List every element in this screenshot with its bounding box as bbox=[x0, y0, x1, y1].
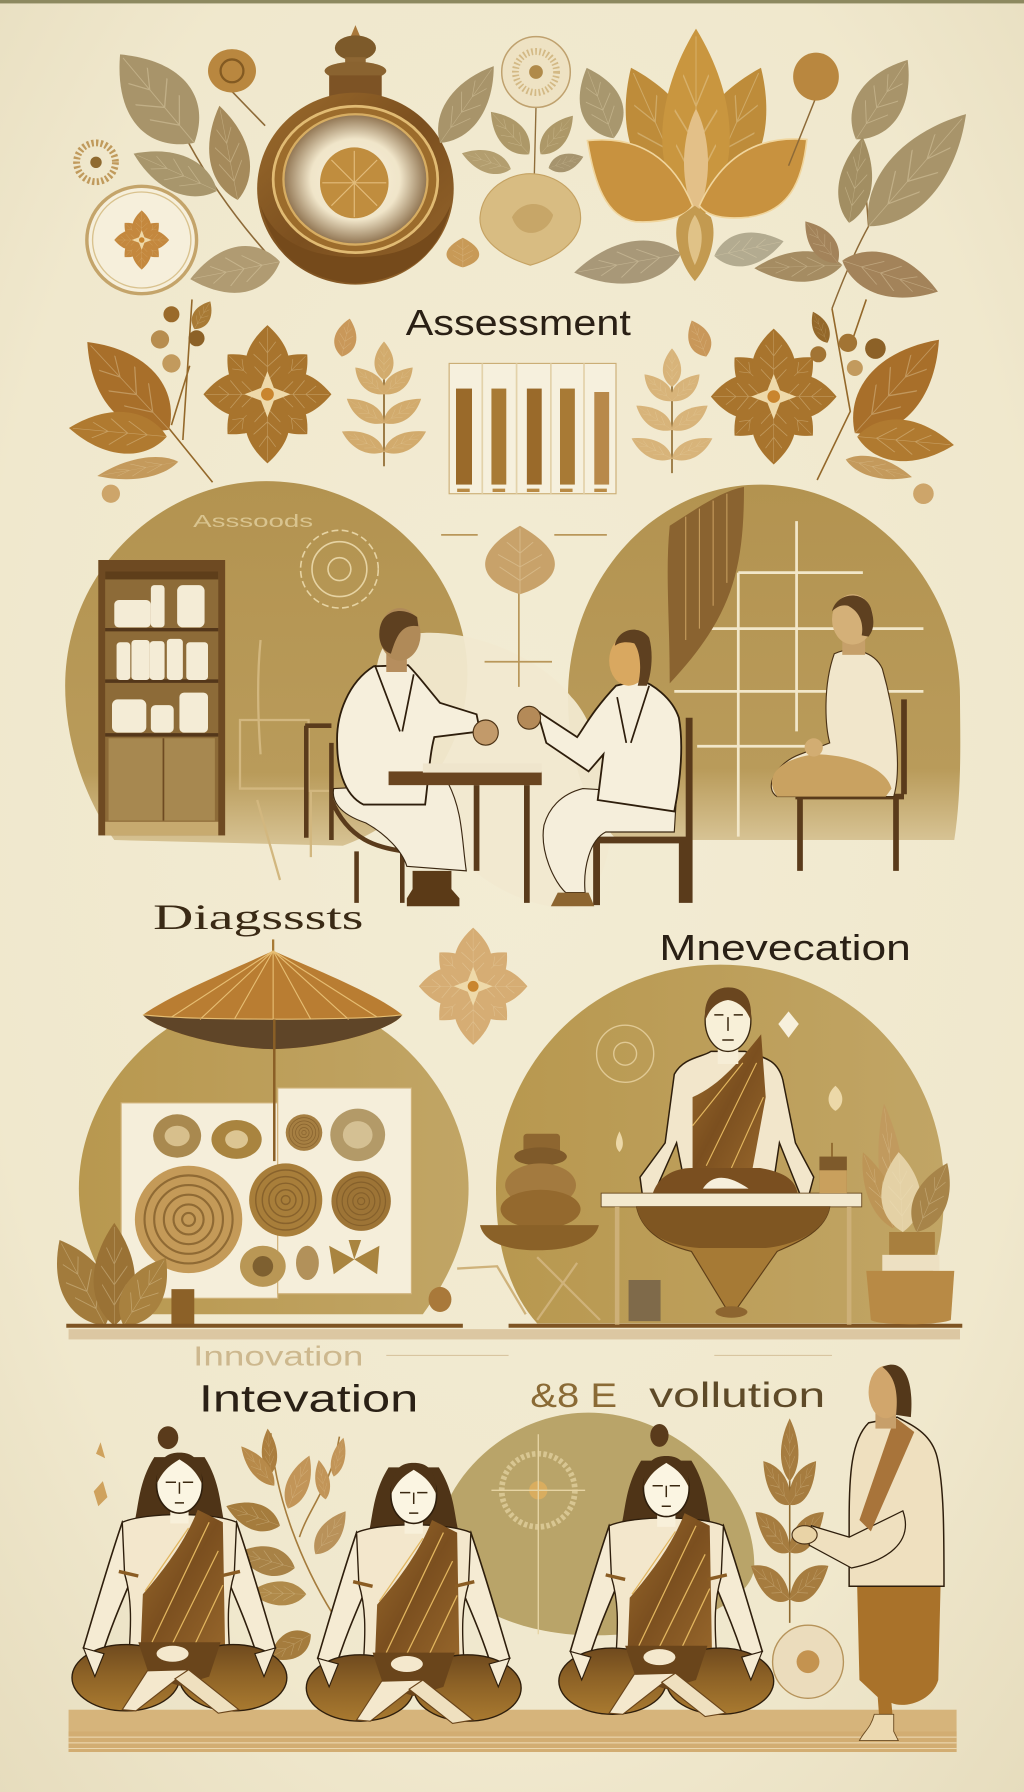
central seed medallions and leaves bbox=[425, 37, 633, 267]
central leaf bbox=[441, 526, 607, 687]
figure 1 bbox=[72, 1426, 287, 1713]
vase bbox=[819, 1143, 847, 1193]
panel: meditation bbox=[429, 965, 962, 1325]
figure: practitioner right bbox=[518, 630, 681, 906]
panel: consultation room bbox=[65, 481, 960, 909]
pendant vessel bbox=[257, 25, 454, 285]
heading: Diagnosis: Diagsssts bbox=[153, 897, 363, 937]
heading: Assessment: Assessment bbox=[406, 302, 631, 343]
left botanical group bbox=[67, 297, 431, 503]
right leaf cluster bbox=[754, 47, 987, 311]
right chair bbox=[594, 718, 689, 905]
figure: meditating practitioner bbox=[640, 987, 814, 1194]
pole bbox=[273, 1019, 275, 1161]
floating flower bbox=[419, 928, 527, 1045]
books bbox=[629, 1280, 661, 1321]
heading: and Evolution bbox=[530, 1375, 825, 1415]
cream floor glow bbox=[376, 633, 611, 909]
bookshelf bbox=[98, 560, 225, 835]
jars bbox=[480, 1134, 599, 1250]
poster bbox=[121, 1019, 411, 1298]
faded label: Innovation: Innovation bbox=[193, 1341, 363, 1372]
faded desk sketch bbox=[240, 640, 331, 880]
plant bbox=[39, 1223, 194, 1336]
right botanical group bbox=[627, 299, 960, 504]
assessment botanical row and chart bbox=[67, 297, 960, 504]
left arch bbox=[79, 994, 469, 1314]
faded sketch bbox=[457, 1257, 600, 1320]
standing practitioner bbox=[792, 1365, 944, 1741]
panel: diagnosis chart bbox=[39, 928, 962, 1339]
bars bbox=[456, 389, 609, 485]
figure 2 bbox=[306, 1463, 521, 1723]
ground strip bbox=[66, 1324, 962, 1327]
lotus bbox=[571, 29, 807, 293]
heading: and Evolution: &8 E bbox=[530, 1377, 617, 1415]
right arch bbox=[568, 485, 960, 840]
figure: practitioner left bbox=[333, 608, 498, 906]
floor bbox=[69, 1710, 957, 1752]
right plant and pedestal bbox=[852, 1102, 962, 1324]
left chair bbox=[305, 726, 406, 903]
table bbox=[389, 763, 542, 903]
ornaments bbox=[597, 1025, 654, 1082]
medallion bbox=[87, 186, 197, 294]
umbrella bbox=[143, 939, 402, 1049]
table bbox=[601, 1193, 862, 1325]
figure 3 bbox=[559, 1424, 774, 1717]
wall ornament bbox=[301, 530, 378, 608]
right sprig and disc bbox=[746, 1418, 843, 1698]
curtain bbox=[668, 487, 744, 683]
faint wall label: Asssoods bbox=[193, 511, 313, 531]
bar chart panel bbox=[449, 363, 616, 494]
heading: Intevation: Intevation bbox=[199, 1377, 418, 1419]
heading: and Evolution: vollution bbox=[649, 1375, 825, 1415]
right arch bbox=[496, 965, 944, 1323]
heading: Mnevecation: Mnevecation bbox=[659, 927, 911, 968]
tissue samples bbox=[135, 1109, 391, 1287]
mortar bbox=[429, 1287, 451, 1312]
left sprig bbox=[94, 1428, 355, 1670]
window grid bbox=[674, 521, 923, 837]
panel: group practice bbox=[69, 1365, 957, 1752]
left leaf cluster bbox=[77, 33, 284, 302]
top botanical row bbox=[77, 25, 987, 311]
central arch bbox=[438, 1413, 754, 1635]
figure: seated patient bbox=[771, 594, 904, 871]
sun ornament bbox=[491, 1434, 585, 1634]
left arch bbox=[65, 481, 467, 846]
bottles bbox=[112, 585, 208, 733]
